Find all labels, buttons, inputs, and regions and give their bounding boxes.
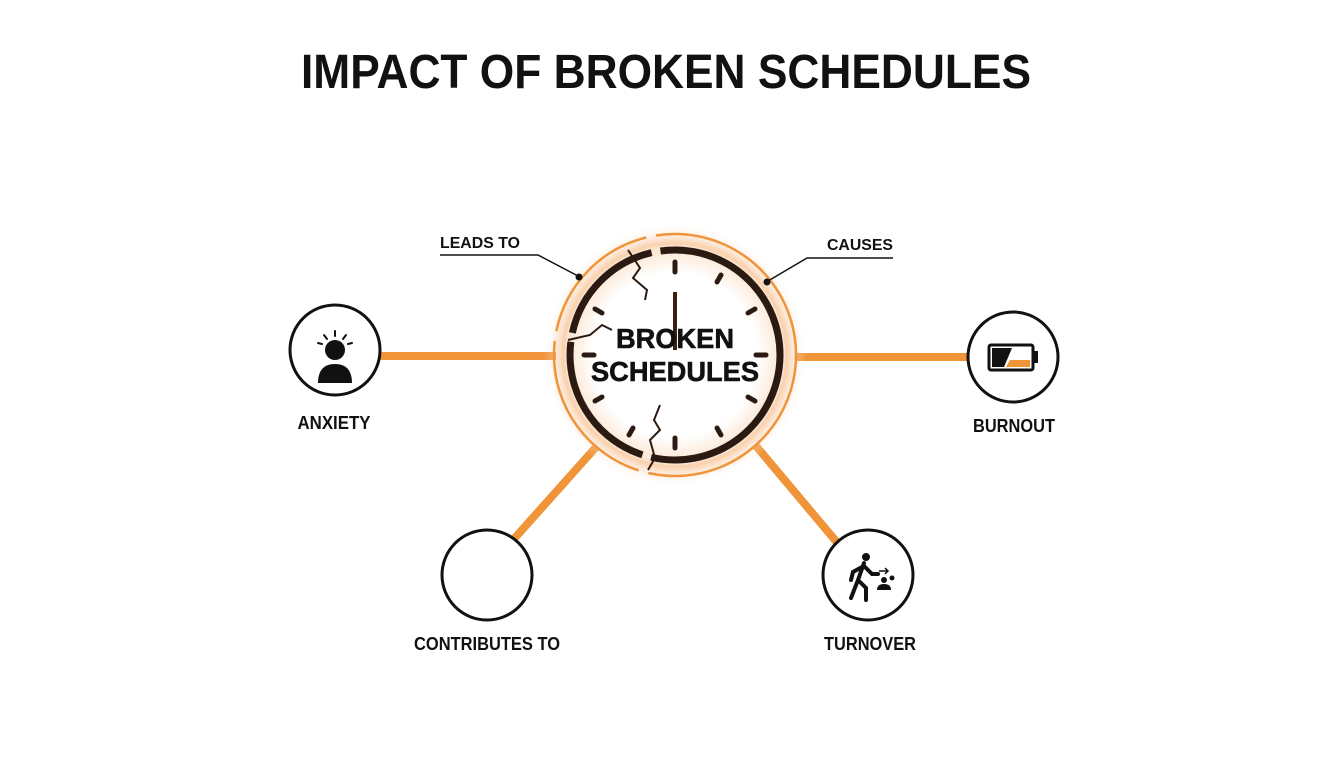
node: contributes to: CONTRIBUTES TO [414,634,560,654]
central clock: broken schedules [543,223,807,487]
node: turnover: TURNOVER [824,634,916,654]
connector lines [380,356,968,546]
icon: low battery [989,345,1038,370]
node: anxiety: ANXIETY [298,413,370,433]
clock label: BROKEN [616,323,734,354]
callout: causes [764,237,893,286]
node: turnover [823,530,916,654]
clock hand [673,292,677,350]
callout: leads to [440,235,582,280]
callout: leads to: LEADS TO [440,235,520,252]
node: anxiety [290,305,380,433]
icon: person leaving [851,553,894,600]
node: burnout: BURNOUT [973,416,1055,436]
node: burnout [968,312,1058,436]
cracks [568,250,660,470]
node: contributes to [414,530,560,654]
clock ticks [584,262,766,448]
central clock: broken schedules: SCHEDULES [591,356,759,387]
callout: causes: CAUSES [827,237,893,254]
icon: stressed person [318,331,352,383]
title: IMPACT OF BROKEN SCHEDULES [301,46,1031,99]
